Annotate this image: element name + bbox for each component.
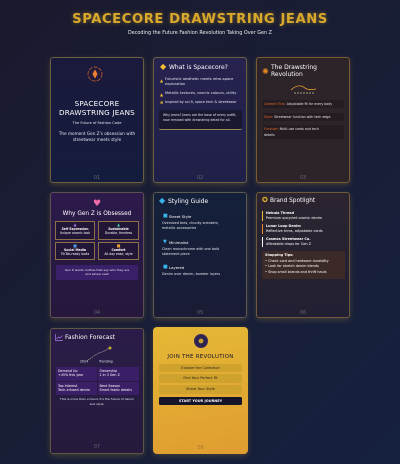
stat: sustainable: Sustainable [108,227,129,231]
stat: social media [55,242,95,260]
forecast: ownership: Ownership [100,369,117,373]
forecast note [60,397,134,406]
action: first: Explore the Collection [181,366,220,370]
heading: Why Gen Z is Obsessed [63,210,131,216]
brand: orbit: Reflective trims, adjustable cords [266,228,323,232]
stat: comfort: Comfort [111,248,126,252]
guide: minimal: Minimalist [169,240,188,245]
forecast: sustainability [56,382,97,395]
cover heading [59,98,135,117]
cover description: streetwear meets style [73,136,121,142]
feature: comfort [263,100,344,108]
stat: social media: ■ [73,243,77,248]
guide: street style [162,213,219,230]
subtitle: Decoding the Future Fashion Revolution Taking Over Gen Z [128,30,272,36]
page number: 06 [300,310,306,316]
guide: layered: Layered [169,265,184,270]
page number: 01 [94,175,100,181]
panel: join the revolution [153,327,248,454]
CTA heading: JOIN THE REVOLUTION [167,354,234,360]
cover heading: SPACECORE [75,98,119,108]
guide: layered [162,264,220,276]
trend line chart: Trending [98,360,113,364]
panel: cover [50,57,144,183]
brand: cosmos: Affordable drops for Gen Z [266,242,311,246]
shopping tips: Shopping Tips: [265,253,294,257]
forecast: ownership [98,367,138,381]
page number: 05 [197,310,203,316]
feature: style: Style: Streetwear function with tech edge [264,115,330,119]
panel: why gen z is obsessed [50,192,144,318]
brand: cosmos [262,236,346,246]
forecast: next: Next Season [100,384,120,388]
guide: minimal: Clean monochrome with one bold statement piece [162,246,219,256]
cover tagline: The Future of Fashion Code [73,121,121,125]
icon: heart: ♥ [93,199,101,209]
forecast: next [98,382,138,395]
icon: gear: ✺ [262,67,269,76]
stat: social media: Social Media [64,248,86,252]
feature: function: details [264,132,275,136]
stat: comfort: ■ [117,243,120,248]
forecast: growth [56,367,97,381]
bullet list: ▲ [160,92,163,96]
cover description: The moment Gen Z's obsession with [59,130,135,136]
forecast note: and style. [90,402,104,406]
panel: what is spacecore [153,57,247,183]
icon: award: ✪ [262,196,268,204]
stat: sustainable: Durable, timeless [105,231,132,235]
heading: Styling Guide [168,198,208,205]
callout: Why Jeans? Jeans are the base of every outfit, now remixed with drawstring detail for all. [163,113,236,122]
stat: comfort [98,242,139,260]
action: second [159,374,242,383]
callout [56,265,138,280]
forecast: ownership: 1 in 3 Gen Z [100,373,120,377]
forecast: growth: +45% this year [58,373,84,377]
callout [159,110,242,130]
icon: drawstring diagram [290,86,316,94]
bullet list [160,77,236,105]
action: first [159,364,242,372]
icon: palette: ◆ [159,196,165,205]
cover heading: DRAWSTRING JEANS [59,108,135,117]
brand: nebula [262,210,346,220]
heading: What is Spacecore? [169,64,228,71]
shopping tips: • Shop small brands and thrift hauls [265,270,326,274]
stat: self expression: ▲ [73,222,77,227]
stat: sustainable [98,221,139,240]
guide: street style: ■ [163,213,168,219]
feature: function: Function: Multi-use cords and tech [264,127,319,131]
action: second: Find Your Perfect Fit [183,376,218,380]
callout: and where next [85,272,109,276]
bullet list: Inspired by sci-fi, space tech & streetwear [165,100,236,104]
guide: layered: Denim over denim, bomber layers [162,272,220,276]
page number: 08 [197,445,204,451]
icon: chart [55,334,63,341]
shopping tips: • Look for stretch denim blends [265,264,319,268]
icon: rocket: ◆ [160,62,166,71]
heading: Brand Spotlight [270,198,315,204]
brand: nebula: Nebula Thread [266,210,294,214]
stat: self expression: Self Expression [62,227,88,231]
brand: orbit: Lunar Loop Denim [266,224,301,228]
panel: brand spotlight [256,192,350,318]
panel: drawstring revolution [256,57,350,183]
title: SPACECORE DRAWSTRING JEANS [72,12,328,26]
brand: cosmos: Cosmos Streetwear Co. [266,236,311,240]
bullet list: ✖ [160,100,163,105]
page number: 02 [197,175,203,181]
stat: social media: TikTok-ready looks [61,252,89,256]
guide: street style: Street Style [169,214,191,219]
shopping tips: • Check cord and hardware durability [265,259,329,263]
panel: styling guide [153,192,247,318]
trend line chart [80,346,113,364]
guide: minimal [162,239,219,256]
guide: street style: Oversized tees, chunky sneakers, metallic accessories [162,220,219,230]
feature: function [263,125,344,139]
forecast: next: Smart fabric details [100,388,132,392]
page number: 04 [94,310,100,316]
bullet list: ▲ [160,78,163,83]
icon: spacecore emblem [88,66,102,82]
cover description [58,130,135,142]
stat: self expression: Unique cosmic look [60,231,90,235]
guide: layered: ■ [163,264,168,270]
button [159,397,242,405]
feature: style [263,113,344,121]
bullet list: Futuristic aesthetic meets retro-space exploration [165,77,233,86]
brand: nebula: Premium upcycled cosmic denim [266,216,322,220]
shopping tips [262,251,345,279]
bullet list: Metallic textures, cosmic colours, utility [165,91,236,95]
icon: badge [194,334,208,348]
heading: The Drawstring Revolution [271,64,317,78]
button: START YOUR JOURNEY [179,399,222,403]
page number: 07 [94,444,100,450]
action: third [159,385,242,394]
page number: 03 [300,175,306,181]
trend line chart: 2024 [80,360,88,364]
forecast: sustainability: Top Interest [58,384,77,388]
stat: comfort: All-day ease, style [104,252,133,256]
panel: fashion forecast [50,328,144,454]
callout: Gen Z wants clothes that say who they are [65,268,129,272]
stat: sustainable: ▲ [117,222,120,227]
forecast: sustainability: Tech-infused denim [58,388,90,392]
brand: orbit [262,224,346,234]
heading: Fashion Forecast [65,334,115,340]
stat: self expression [55,221,95,240]
forecast note: This is more than a trend. It's the future of denim [60,397,134,401]
feature: comfort: Comfort First: Adjustable fit for every body [264,102,332,106]
action: third: Share Your Style [186,387,215,391]
forecast: growth: Demand Up [58,369,78,373]
guide: minimal: ▼ [163,239,167,245]
